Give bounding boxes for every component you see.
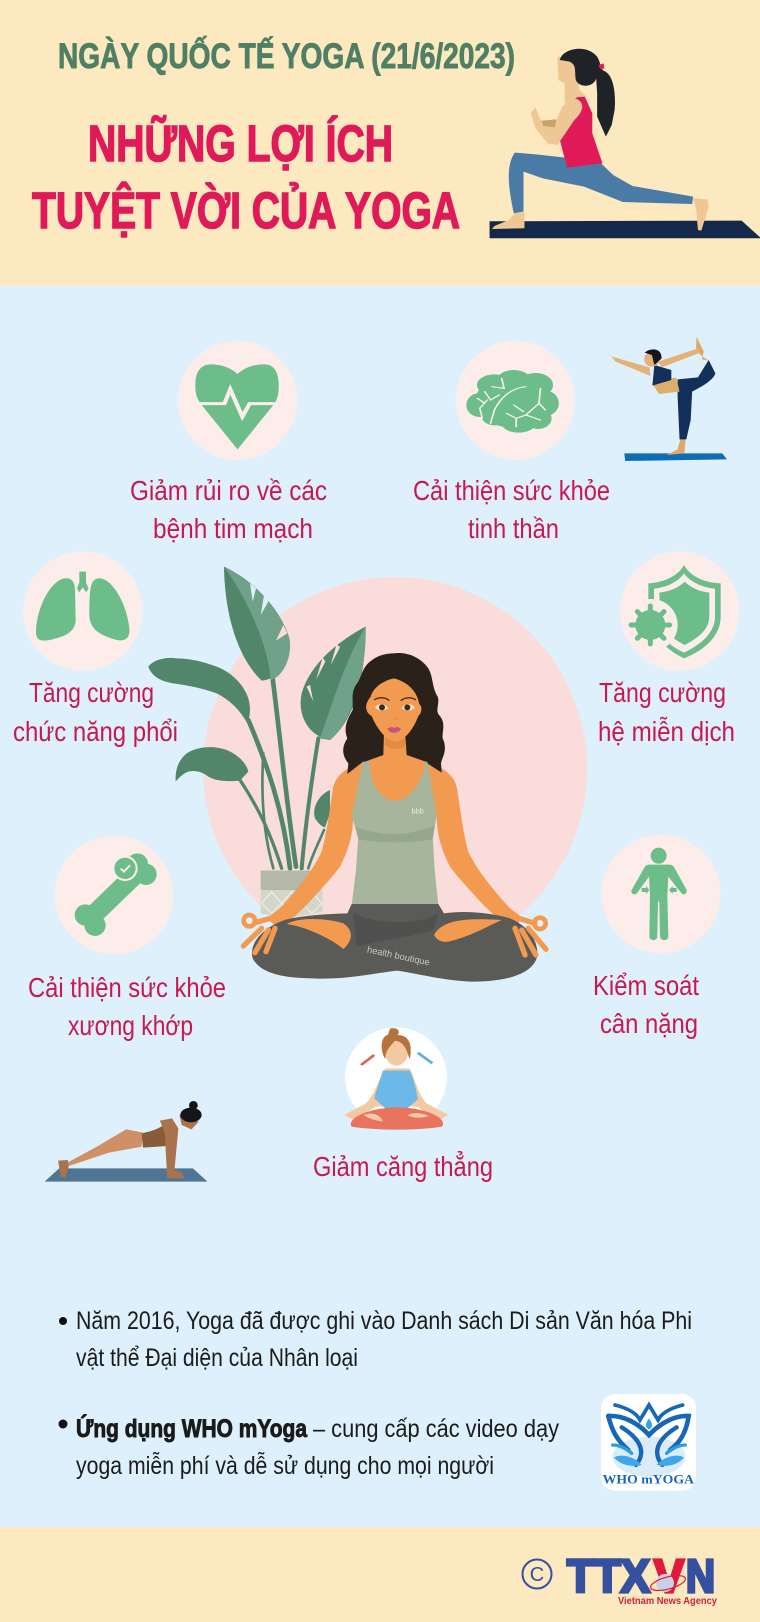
title: NHỮNG LỢI ÍCH [88,114,393,172]
label: Giảm căng thẳng [313,1150,493,1182]
item: stress reduction [313,1027,493,1182]
flower pot [261,871,322,919]
label: hệ miễn dịch [598,716,735,747]
item: heart health [130,341,327,544]
logo tagline: Vietnam News Agency [618,1595,717,1607]
panel: header [0,0,760,286]
icon: heart [178,341,297,460]
label: xương khớp [68,1010,193,1041]
icon: lungs [23,551,142,671]
feet [287,919,351,949]
logo: TTXVN: V [654,1550,684,1602]
bullet [58,1420,68,1428]
text block: WHO mYoga app: yoga miễn phí và dễ sử dụng cho mọi người [76,1451,494,1480]
icon: WHO mYoga app logo: WHO mYOGA [603,1472,694,1486]
illustration: meditating woman with plant [148,567,546,982]
icon: copyright [522,1560,552,1588]
label: Kiểm soát [593,970,699,1001]
icon: copyright: C [530,1564,544,1586]
face [366,678,421,742]
item: mental health [413,341,610,544]
title [32,114,460,239]
item: lung function [13,551,178,747]
icon: shield with virus [620,551,739,671]
label [413,475,610,544]
logo: TTXVN: TTX [567,1550,650,1602]
neck and chest [364,732,427,803]
label [130,475,327,544]
label [28,972,226,1041]
item: bones and joints [28,836,226,1041]
illustration: central pink circle [203,577,587,961]
text block: UNESCO fact: vật thể Đại diện của Nhân loại [76,1344,358,1372]
label [13,677,178,747]
item: weight control [593,835,720,1039]
icon: breathing meditation figure [344,1027,448,1130]
label: Tăng cường [29,677,154,708]
label: tinh thần [468,513,559,544]
illustration: plank pose on mat [45,1101,207,1182]
label [593,970,699,1039]
tank top [352,762,438,905]
item: immune system [598,551,739,747]
label: Giảm rủi ro về các [130,475,327,506]
crossed legs [252,904,537,982]
label: chức năng phổi [13,716,178,747]
logo on pants: health boutique [366,945,431,968]
label: Cải thiện sức khỏe [413,475,610,506]
icon: bone with check [55,836,173,954]
text block: WHO mYoga app: Ứng dụng WHO mYoga [76,1413,308,1443]
hair [343,653,445,774]
illustration: dancer pose on blue mat [605,337,727,461]
plant stems [240,678,324,868]
icon: brain [456,341,575,460]
bullet [59,1317,67,1325]
panel: light blue body background [0,286,760,1527]
icon: WHO mYoga app logo [601,1394,696,1491]
text block: UNESCO fact [59,1307,692,1372]
illustration: lunge yoga pose [490,49,760,238]
tank top: bbb [412,806,424,815]
label: cân nặng [600,1008,698,1039]
subtitle: NGÀY QUỐC TẾ YOGA (21/6/2023) [58,36,515,76]
plant leaves [148,567,366,827]
panel: footer [0,1527,760,1622]
face details [374,698,416,733]
text block: WHO mYoga app [58,1413,559,1480]
arms and shoulders [267,762,523,930]
hands [243,915,546,955]
title: TUYỆT VỜI CỦA YOGA [32,181,460,239]
label: Cải thiện sức khỏe [28,972,226,1003]
label [598,677,735,747]
icon: body with arrows [602,835,720,953]
logo: TTXVN [567,1550,715,1602]
label: Tăng cường [599,677,726,708]
logo: TTXVN: N [686,1550,715,1602]
text block: WHO mYoga app: – cung cấp các video dạy [313,1415,559,1443]
label: bệnh tim mạch [153,513,313,544]
